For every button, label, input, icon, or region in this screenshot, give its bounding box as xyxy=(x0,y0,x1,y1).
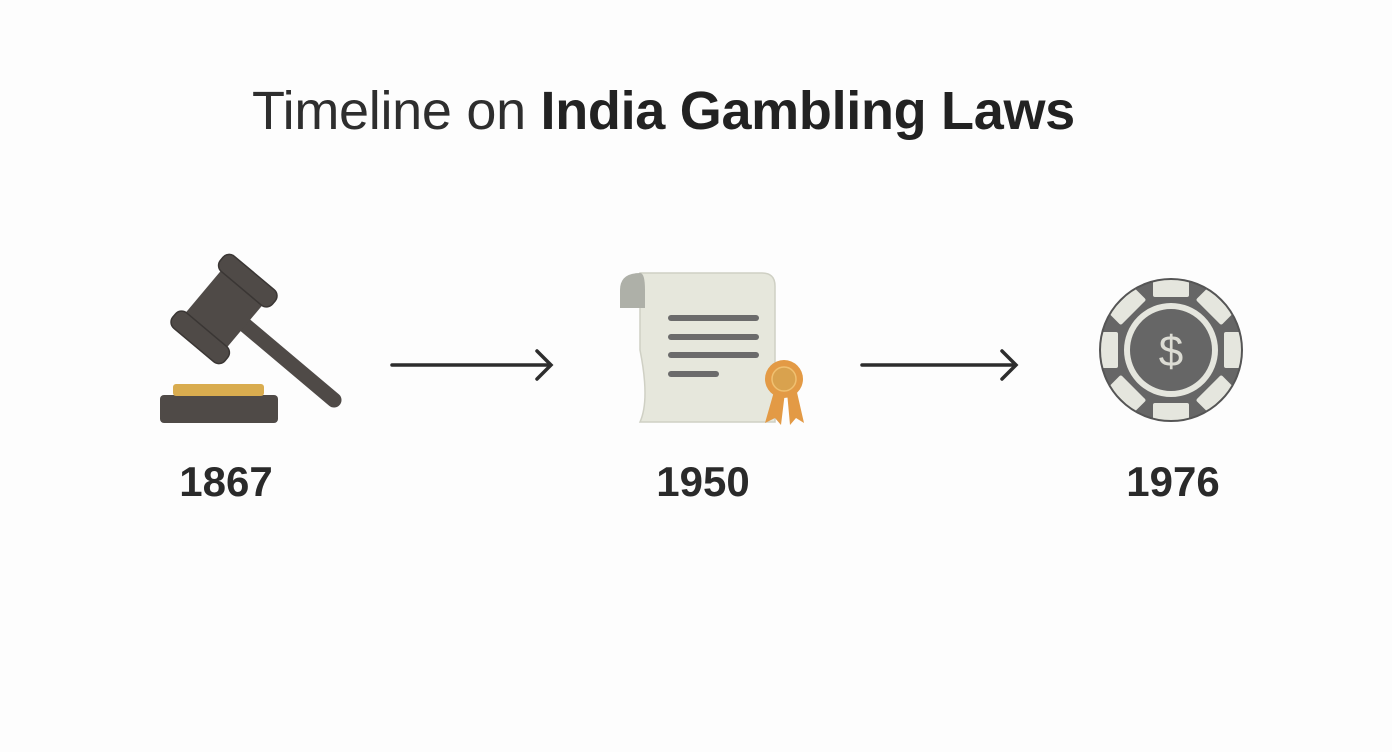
year 1976: 1976 xyxy=(1126,458,1220,505)
year 1867: 1867 xyxy=(179,458,273,505)
arrow 1 xyxy=(392,351,551,379)
icon: poker chip xyxy=(1100,279,1242,421)
icon: poker chip: $ xyxy=(1159,327,1183,376)
icon: scroll certificate xyxy=(620,273,804,425)
year 1950: 1950 xyxy=(656,458,750,505)
title: Timeline on India Gambling Laws xyxy=(252,81,1075,141)
arrow 2 xyxy=(862,351,1016,379)
icon: gavel xyxy=(160,251,334,423)
